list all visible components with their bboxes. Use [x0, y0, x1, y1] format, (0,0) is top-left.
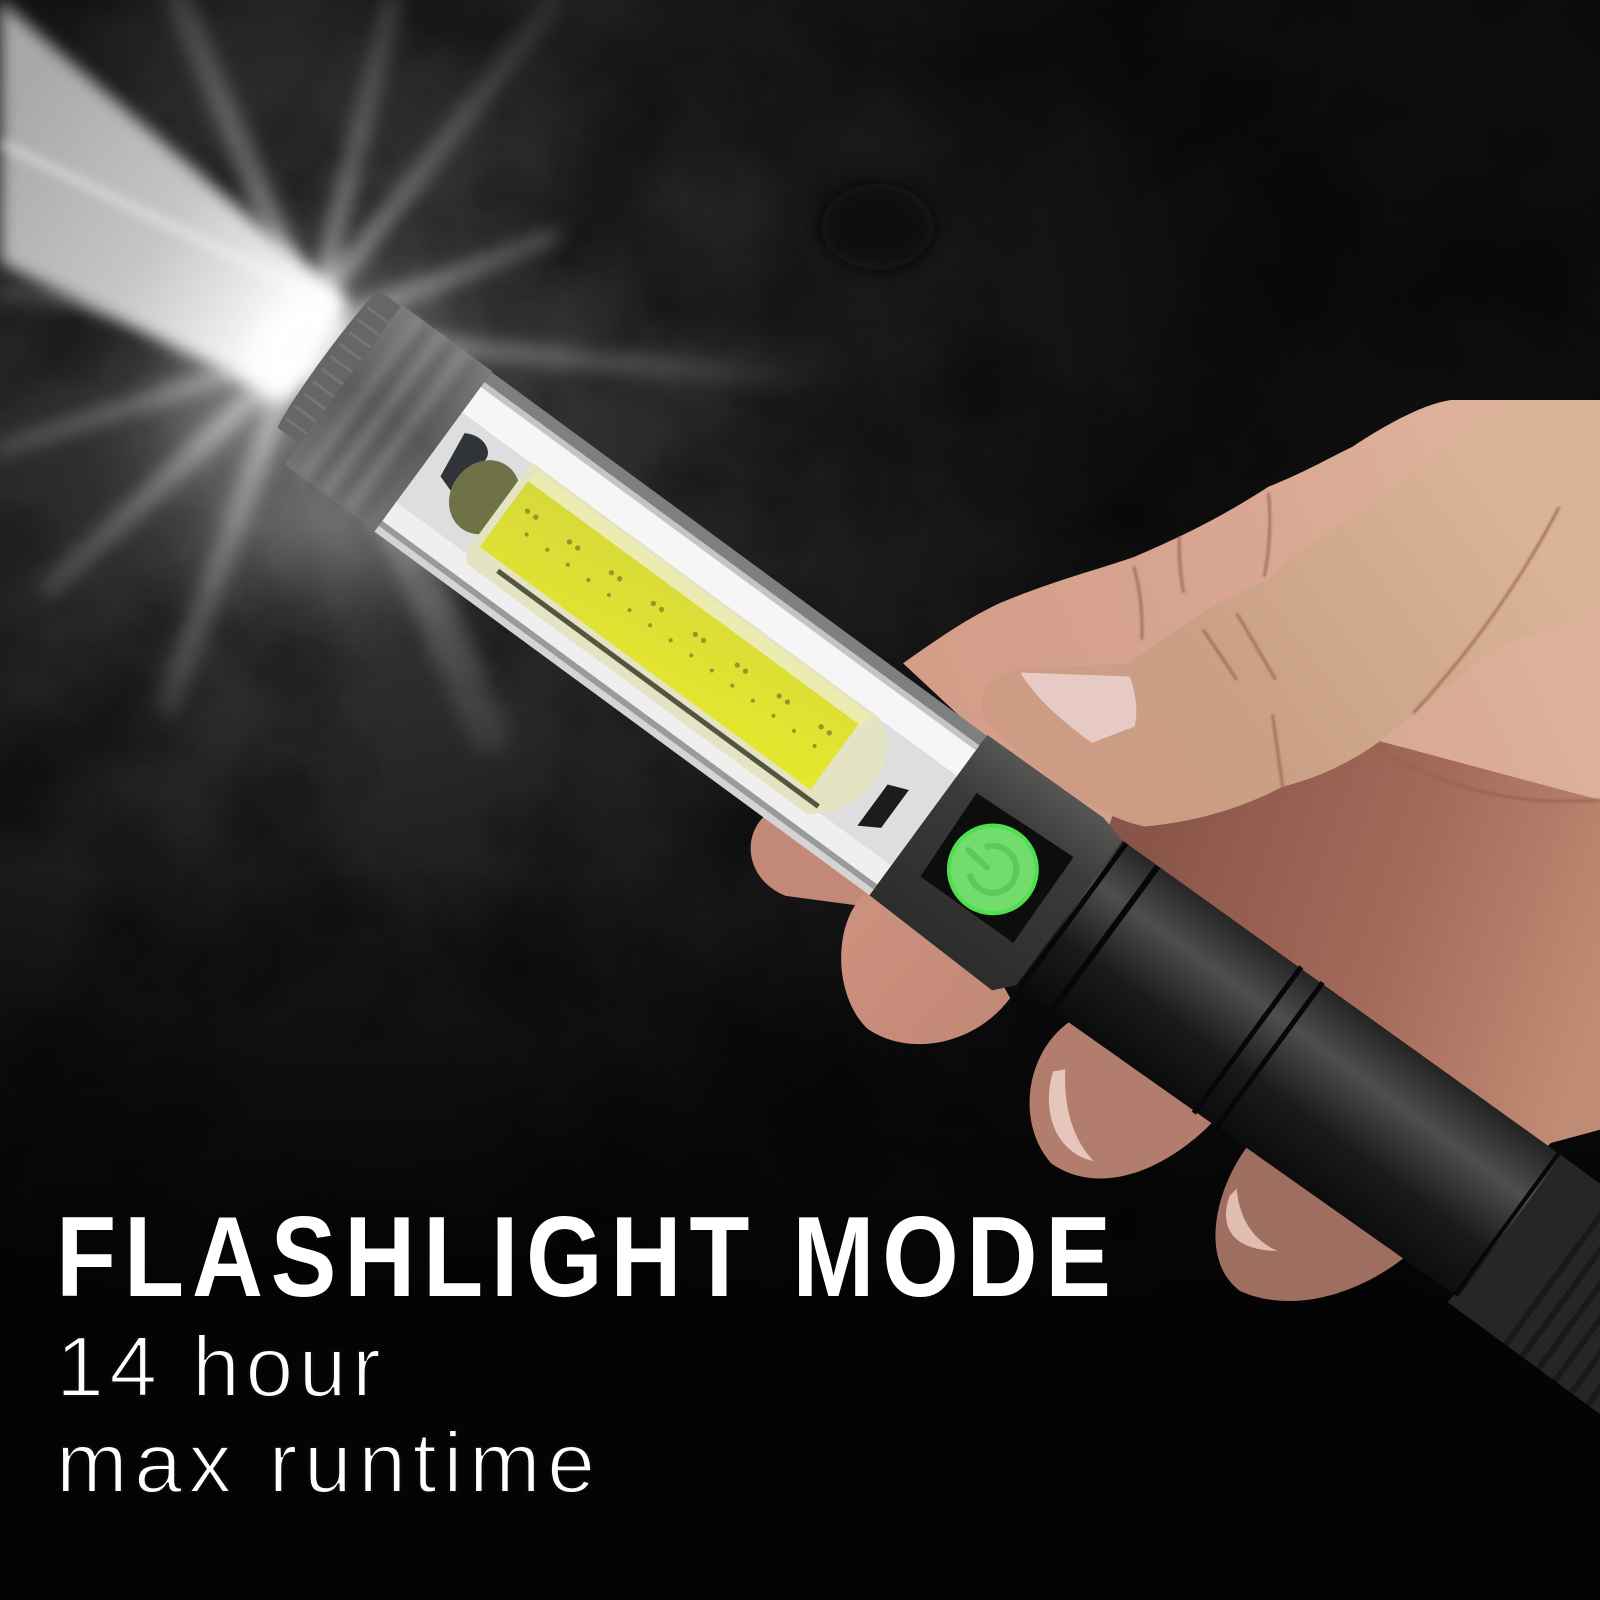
COB panel base [460, 462, 907, 835]
tube inner reflection, dark patch near the switch [857, 778, 909, 838]
LED dots [513, 507, 833, 752]
hand: palm [1102, 740, 1600, 1163]
subtitle line 1: 14 hour [56, 1319, 381, 1415]
flashlight [256, 284, 1600, 1477]
green power button [947, 823, 1039, 915]
reflector dome [434, 446, 535, 548]
title: FLASHLIGHT MODE [56, 1193, 1111, 1321]
tube inner reflection, dark patch near the head [431, 429, 494, 499]
subtitle line 2: max runtime [56, 1415, 595, 1511]
hand: back of hand [903, 400, 1600, 1143]
hand: fingers behind the flashlight [751, 806, 1413, 1301]
flashlight body [1016, 836, 1562, 1305]
beam of light [0, 0, 360, 411]
dark lower channel [496, 569, 820, 808]
switch housing [867, 733, 1127, 1000]
rear threaded section [1448, 1153, 1600, 1462]
knurled cap [274, 287, 405, 447]
body rings [1018, 837, 1560, 1304]
clear tube housing [374, 372, 987, 895]
head barrel [285, 305, 492, 531]
hand: thumb [982, 400, 1600, 827]
cream upper edge [530, 471, 870, 726]
button recess [920, 793, 1073, 943]
glow around the lamp [163, 276, 469, 582]
light rays [0, 0, 806, 735]
hand: skin creases [1134, 493, 1600, 801]
yellow COB LED [480, 481, 859, 790]
